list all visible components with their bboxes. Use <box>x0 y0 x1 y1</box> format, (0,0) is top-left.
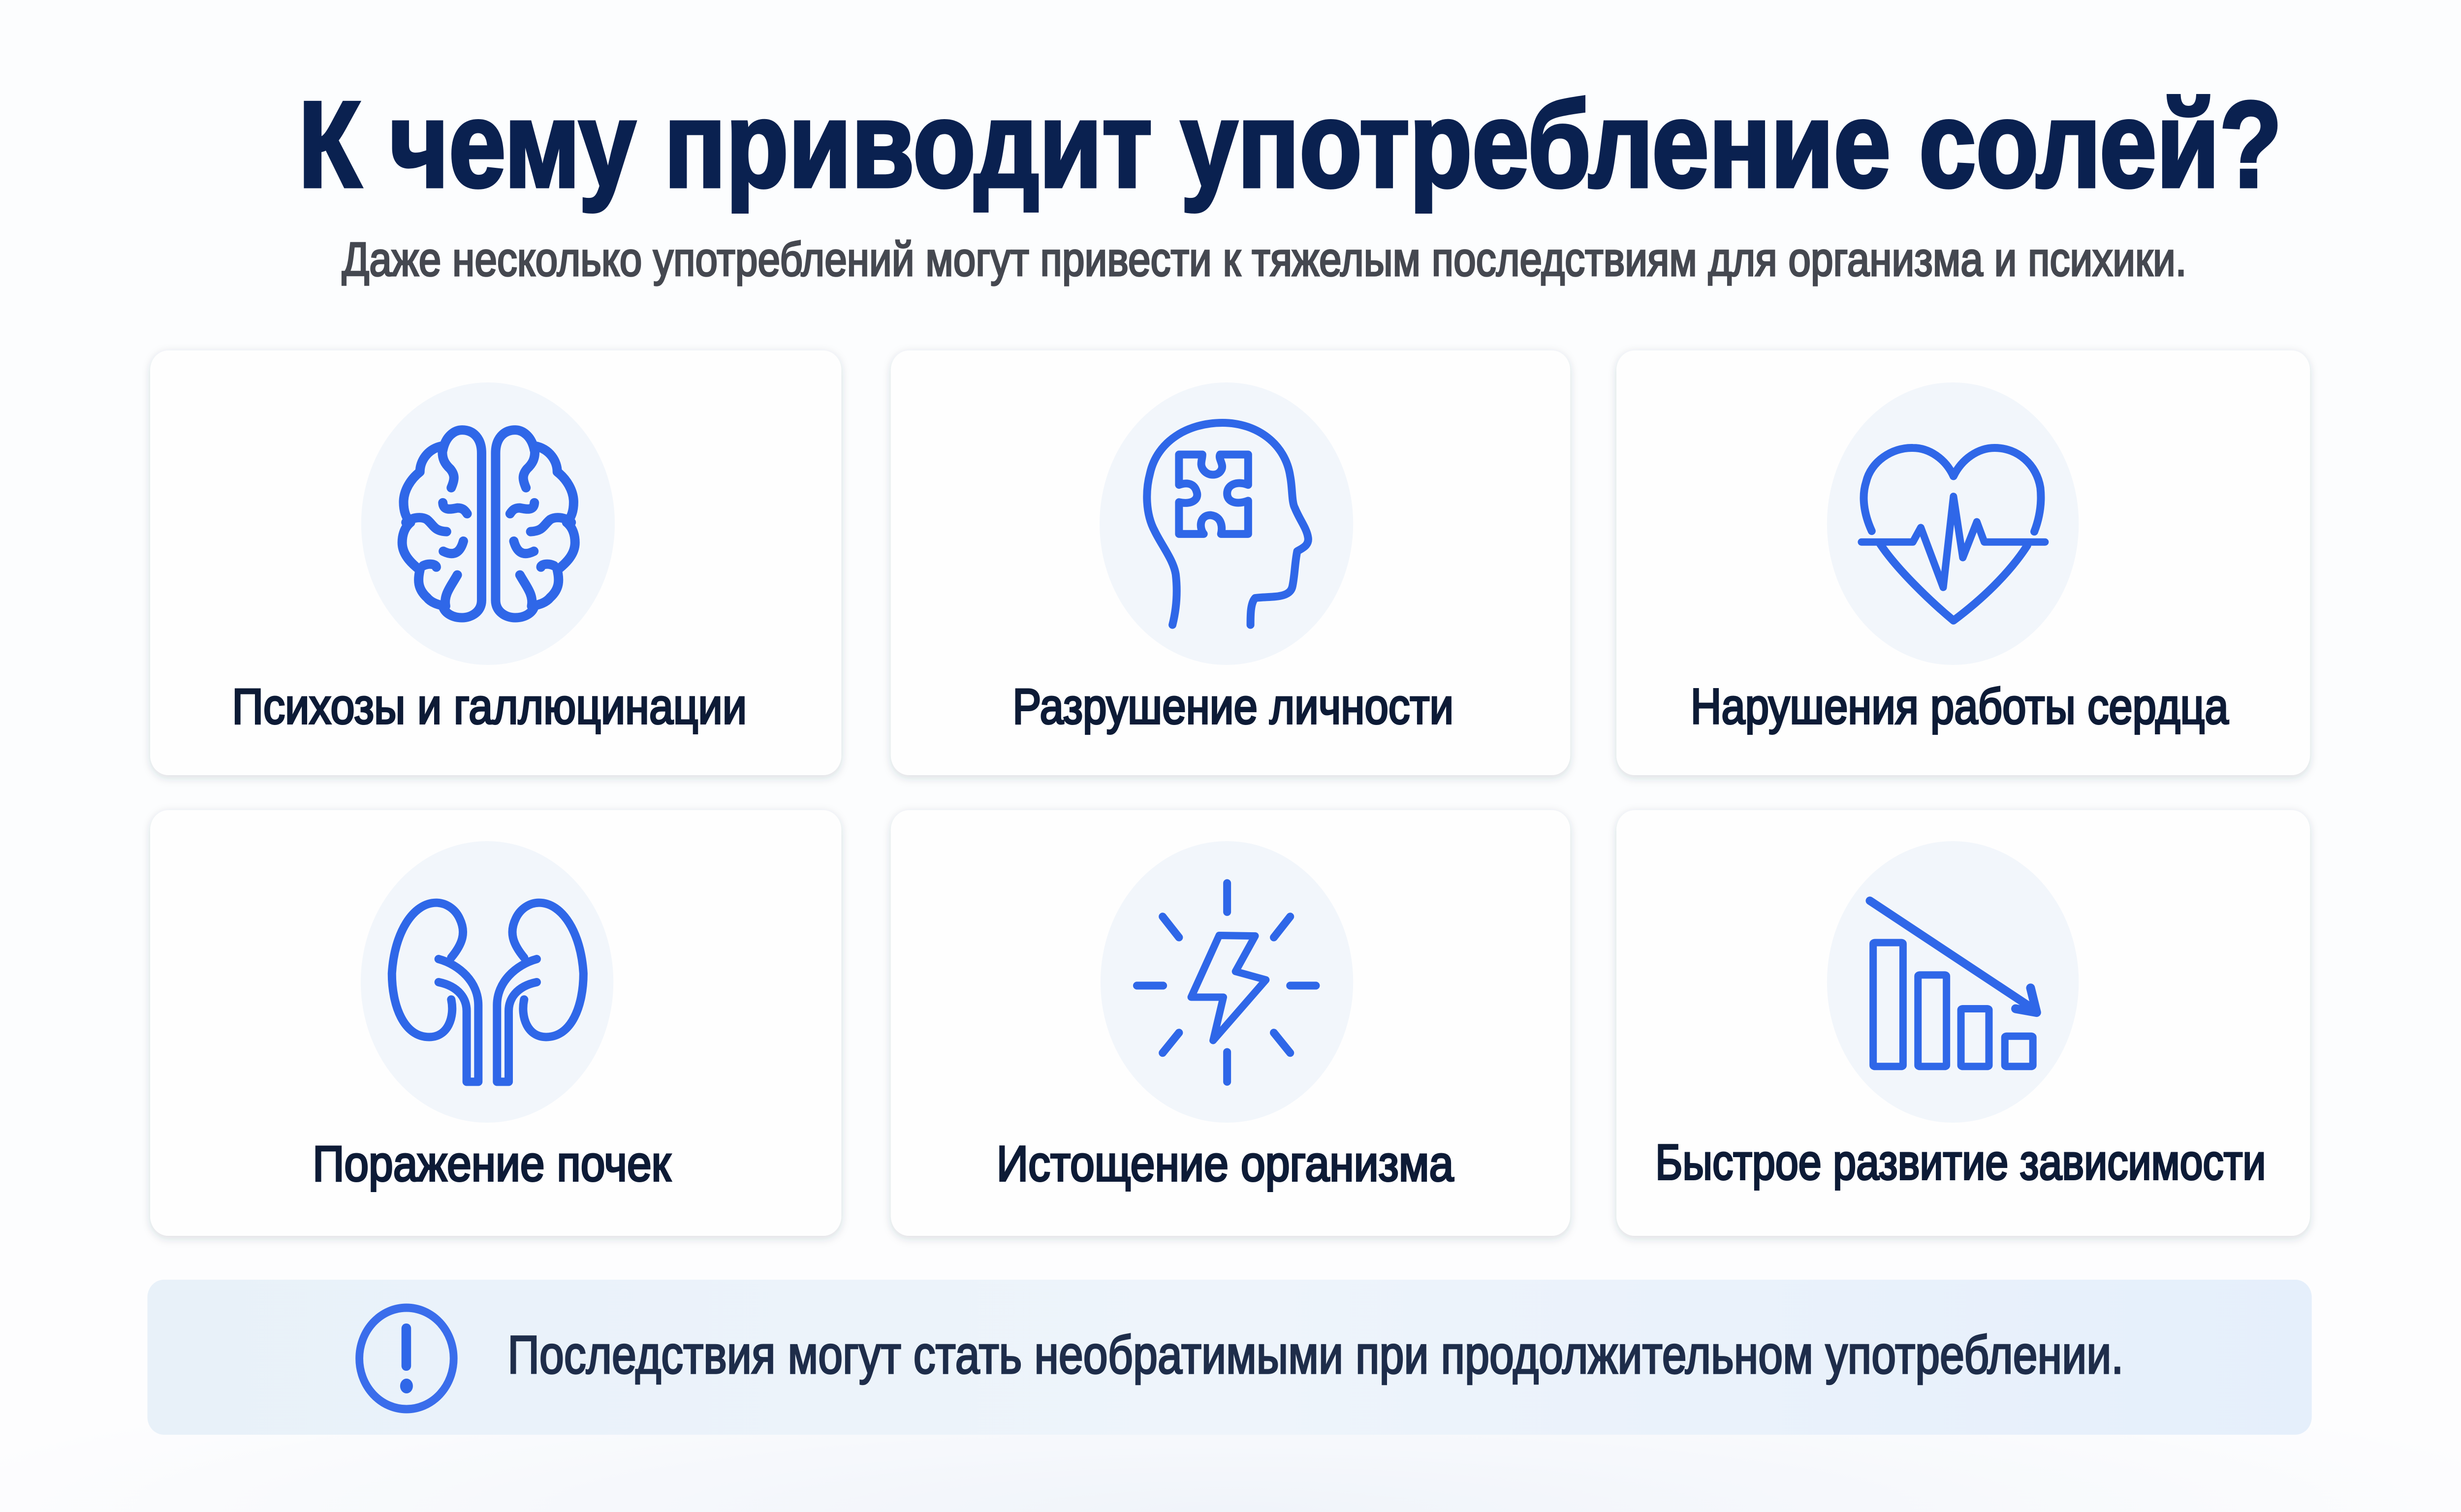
icon: brain <box>402 430 575 618</box>
icon: heart with pulse <box>1862 448 2045 621</box>
panel: personality destruction <box>891 350 1570 775</box>
icon: lightning with rays <box>1137 883 1316 1082</box>
label: kidneys: Поражение почек <box>313 1136 671 1192</box>
panel: kidney damage <box>150 810 841 1236</box>
icon: exclamation circle <box>359 1308 454 1409</box>
label: heart: Нарушения работы сердца <box>1691 679 2229 734</box>
label: addiction: Быстрое развитие зависимости <box>1655 1134 2266 1190</box>
title: К чему приводит употребление солей? <box>298 76 2282 213</box>
label: personality: Разрушение личности <box>1012 679 1453 734</box>
subtitle: Даже несколько употреблений могут привести к тяжелым последствиям для организма и психики. <box>342 232 2187 286</box>
panel: heart disorders <box>1616 350 2310 775</box>
panel: exhaustion <box>891 810 1570 1236</box>
callout text: Последствия могут стать необратимыми при продолжительном употреблении. <box>507 1325 2123 1385</box>
icon: head with puzzle <box>1147 423 1308 625</box>
callout: warning banner <box>147 1280 2312 1435</box>
panel: psychoses and hallucinations <box>150 350 841 775</box>
panel: rapid addiction <box>1616 810 2310 1236</box>
label: exhaustion: Истощение организма <box>997 1136 1454 1192</box>
label: psychoses: Психозы и галлюцинации <box>232 679 747 734</box>
icon: kidneys <box>392 903 583 1082</box>
icon: declining bars with arrow <box>1870 901 2037 1067</box>
